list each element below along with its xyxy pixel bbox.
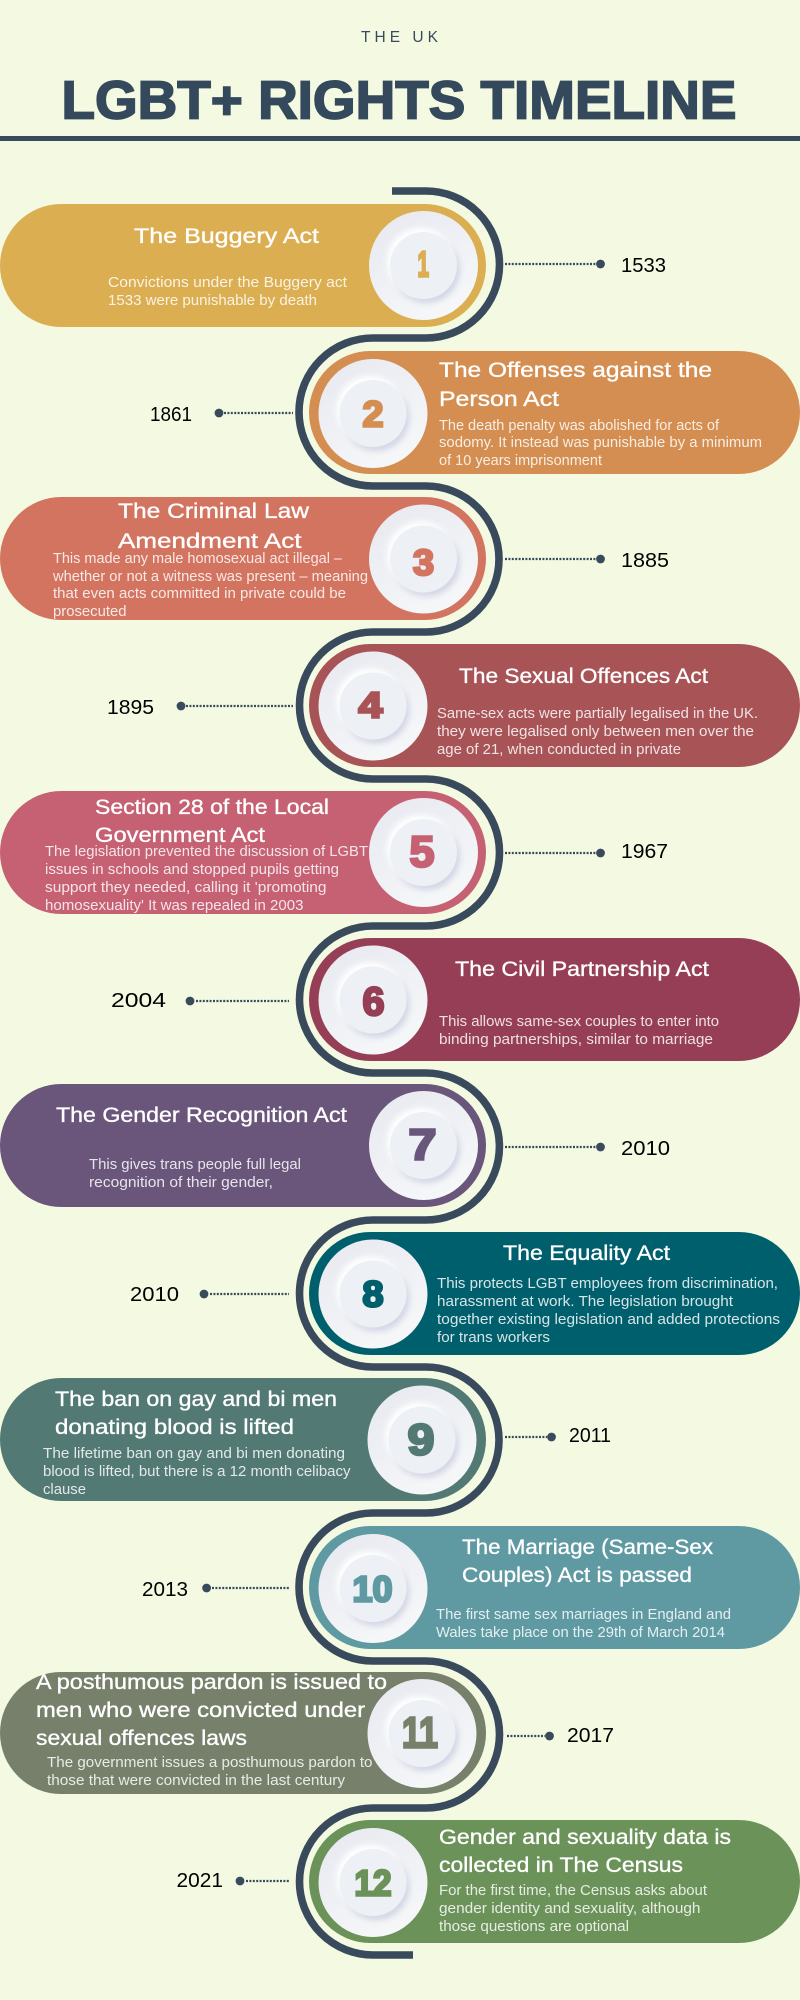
number disc 2 [318, 359, 428, 468]
year 10: 2013 [142, 1578, 188, 1601]
pill 4 [309, 644, 800, 767]
heading 3: Amendment Act [118, 530, 302, 553]
description 7 [89, 1157, 301, 1191]
heading 12 [439, 1826, 731, 1877]
heading 11: A posthumous pardon is issued to [36, 1671, 387, 1694]
year connector 3 [505, 555, 605, 563]
heading 11: sexual offences laws [36, 1727, 247, 1750]
description 5 [45, 844, 368, 914]
description 4: age of 21, when conducted in private [437, 742, 681, 758]
heading 10: The Marriage (Same-Sex [462, 1536, 714, 1559]
year connector 1 [505, 260, 605, 268]
description 3: This made any male homosexual act illegal – [53, 551, 342, 567]
description 5: homosexuality' It was repealed in 2003 [45, 898, 304, 914]
description 8 [437, 1276, 780, 1346]
year connector 5 [505, 849, 605, 857]
pill 6 [309, 938, 800, 1061]
description 8: for trans workers [437, 1330, 550, 1346]
heading 2: Person Act [439, 388, 559, 411]
year 8: 2010 [130, 1283, 179, 1306]
description 3: whether or not a witness was present – meaning [52, 569, 368, 585]
description 2: The death penalty was abolished for acts of [439, 418, 720, 434]
heading 9: donating blood is lifted [55, 1416, 294, 1439]
heading 10: Couples) Act is passed [462, 1564, 692, 1587]
description 4: they were legalised only between men over the [437, 724, 754, 740]
year 3: 1885 [621, 549, 669, 572]
description 2: of 10 years imprisonment [439, 453, 602, 469]
heading 5 [95, 796, 329, 847]
description 3: that even acts committed in private could be [53, 586, 346, 602]
event 2: The Offenses against the Person Act [150, 351, 800, 474]
description 1 [108, 275, 347, 309]
heading 10 [462, 1536, 714, 1587]
number disc 10: 10 [352, 1569, 392, 1610]
heading 2: The Offenses against the [439, 359, 712, 382]
number disc 9 [368, 1386, 476, 1494]
year connector 10 [202, 1584, 289, 1592]
description 4: Same-sex acts were partially legalised in the UK. [437, 706, 758, 722]
heading 8: The Equality Act [503, 1242, 670, 1265]
number disc 8 [318, 1240, 428, 1348]
description 12: gender identity and sexuality, although [439, 1901, 700, 1917]
description 12: those questions are optional [439, 1919, 629, 1935]
year connector 4 [177, 702, 293, 710]
description 9: clause [43, 1482, 86, 1498]
description 11: The government issues a posthumous pardon to [47, 1755, 372, 1771]
number disc 6: 6 [362, 980, 384, 1024]
description 6: This allows same-sex couples to enter into [439, 1014, 719, 1030]
event 10: The Marriage Act [142, 1526, 800, 1649]
year 2: 1861 [150, 403, 192, 426]
heading 12: Gender and sexuality data is [439, 1826, 731, 1849]
heading 7: The Gender Recognition Act [56, 1104, 347, 1127]
eyebrow: THE UK: THE UK [361, 29, 439, 46]
number disc 2: 2 [362, 394, 384, 434]
heading 6: The Civil Partnership Act [455, 958, 709, 981]
number disc 5 [369, 798, 478, 907]
heading 3 [118, 500, 310, 553]
year 9: 2011 [569, 1424, 611, 1447]
number disc 1: 1 [418, 244, 429, 285]
pill 3 [0, 497, 486, 620]
year 1: 1533 [621, 254, 666, 277]
number disc 1 [369, 211, 478, 320]
pill 12 [309, 1820, 800, 1943]
description 8: This protects LGBT employees from discrimination, [437, 1276, 778, 1292]
description 10: The first same sex marriages in England and [436, 1607, 731, 1623]
pill 7 [0, 1084, 486, 1207]
description 1: Convictions under the Buggery act [108, 275, 347, 291]
year connector 2 [215, 409, 293, 417]
number disc 12: 12 [354, 1863, 392, 1904]
number disc 3: 3 [413, 542, 434, 583]
event 12: The Census [176, 1820, 800, 1943]
event 5: Section 28 [0, 791, 668, 914]
heading 4: The Sexual Offences Act [459, 665, 708, 688]
heading 11: men who were convicted under [36, 1699, 365, 1722]
pill 11 [0, 1672, 486, 1794]
serpentine timeline connector [299, 191, 500, 1955]
description 9: The lifetime ban on gay and bi men donating [43, 1446, 345, 1462]
pill 5 [0, 791, 486, 914]
description 7: This gives trans people full legal [89, 1157, 301, 1173]
description 9: blood is lifted, but there is a 12 month celibacy [43, 1464, 351, 1480]
description 4 [437, 706, 758, 758]
number disc 6 [318, 946, 428, 1054]
year connector 11 [507, 1732, 554, 1740]
number disc 11 [368, 1679, 476, 1788]
heading 11 [36, 1671, 387, 1750]
event 3: The Criminal Law Amendment Act [0, 497, 669, 620]
year connector 8 [200, 1290, 289, 1298]
pill 10 [309, 1526, 800, 1649]
heading 5: Section 28 of the Local [95, 796, 329, 819]
description 3 [52, 551, 368, 620]
pill 2 [309, 351, 800, 474]
number disc 10 [318, 1534, 428, 1643]
year connector 9 [505, 1433, 556, 1441]
number disc 7: 7 [408, 1121, 436, 1170]
pill 8 [309, 1232, 800, 1355]
description 5: issues in schools and stopped pupils getting [45, 862, 339, 878]
description 6 [439, 1014, 719, 1048]
description 8: together existing legislation and added protections [437, 1312, 780, 1328]
year 6: 2004 [111, 989, 166, 1012]
description 3: prosecuted [53, 604, 126, 620]
year connector 6 [186, 997, 289, 1005]
event 7: The Gender Recognition Act [0, 1084, 670, 1207]
number disc 7 [369, 1091, 478, 1200]
description 8: harassment at work. The legislation brought [437, 1294, 733, 1310]
year 4: 1895 [107, 696, 154, 719]
description 11: those that were convicted in the last century [47, 1773, 346, 1789]
number disc 4 [318, 652, 428, 760]
event 11: Posthumous pardon [0, 1671, 614, 1794]
event 8: The Equality Act [130, 1232, 800, 1355]
year 12: 2021 [176, 1869, 223, 1892]
heading 9 [55, 1388, 337, 1439]
title: LGBT+ RIGHTS TIMELINE [62, 72, 737, 130]
event 6: The Civil Partnership Act [111, 938, 800, 1061]
year 11: 2017 [567, 1724, 614, 1747]
description 10: Wales take place on the 29th of March 2014 [436, 1625, 725, 1641]
number disc 12 [318, 1828, 428, 1937]
heading 12: collected in The Census [439, 1854, 683, 1877]
description 7: recognition of their gender, [89, 1175, 273, 1191]
description 5: support they needed, calling it 'promoting [45, 880, 326, 896]
year 7: 2010 [621, 1137, 670, 1160]
description 6: binding partnerships, similar to marriage [439, 1032, 713, 1048]
description 12: For the first time, the Census asks about [439, 1883, 707, 1899]
heading 2 [439, 359, 712, 411]
heading 1: The Buggery Act [134, 225, 319, 248]
pill 9 [0, 1378, 486, 1501]
year connector 12 [236, 1877, 290, 1885]
title rule [0, 136, 800, 141]
heading 3: The Criminal Law [118, 500, 310, 523]
event 9: Blood donation ban lifted [0, 1378, 611, 1501]
number disc 8: 8 [362, 1274, 384, 1315]
pill 1 [0, 204, 486, 327]
event 1: The Buggery Act [0, 204, 666, 327]
number disc 11: 11 [402, 1709, 438, 1758]
description 1: 1533 were punishable by death [108, 293, 317, 309]
number disc 4: 4 [358, 685, 382, 726]
description 5: The legislation prevented the discussion of LGBT [45, 844, 368, 860]
description 2 [439, 418, 762, 469]
number disc 3 [369, 504, 478, 614]
event 4: The Sexual Offences Act [107, 644, 800, 767]
heading 9: The ban on gay and bi men [55, 1388, 337, 1411]
year 5: 1967 [621, 840, 668, 863]
description 9 [43, 1446, 351, 1498]
heading 5: Government Act [95, 824, 265, 847]
description 10 [436, 1607, 731, 1641]
description 12 [439, 1883, 707, 1935]
year connector 7 [505, 1143, 605, 1151]
number disc 9: 9 [408, 1416, 434, 1465]
description 2: sodomy. It instead was punishable by a minimum [439, 435, 762, 451]
number disc 5: 5 [410, 828, 434, 877]
description 11 [47, 1755, 372, 1789]
